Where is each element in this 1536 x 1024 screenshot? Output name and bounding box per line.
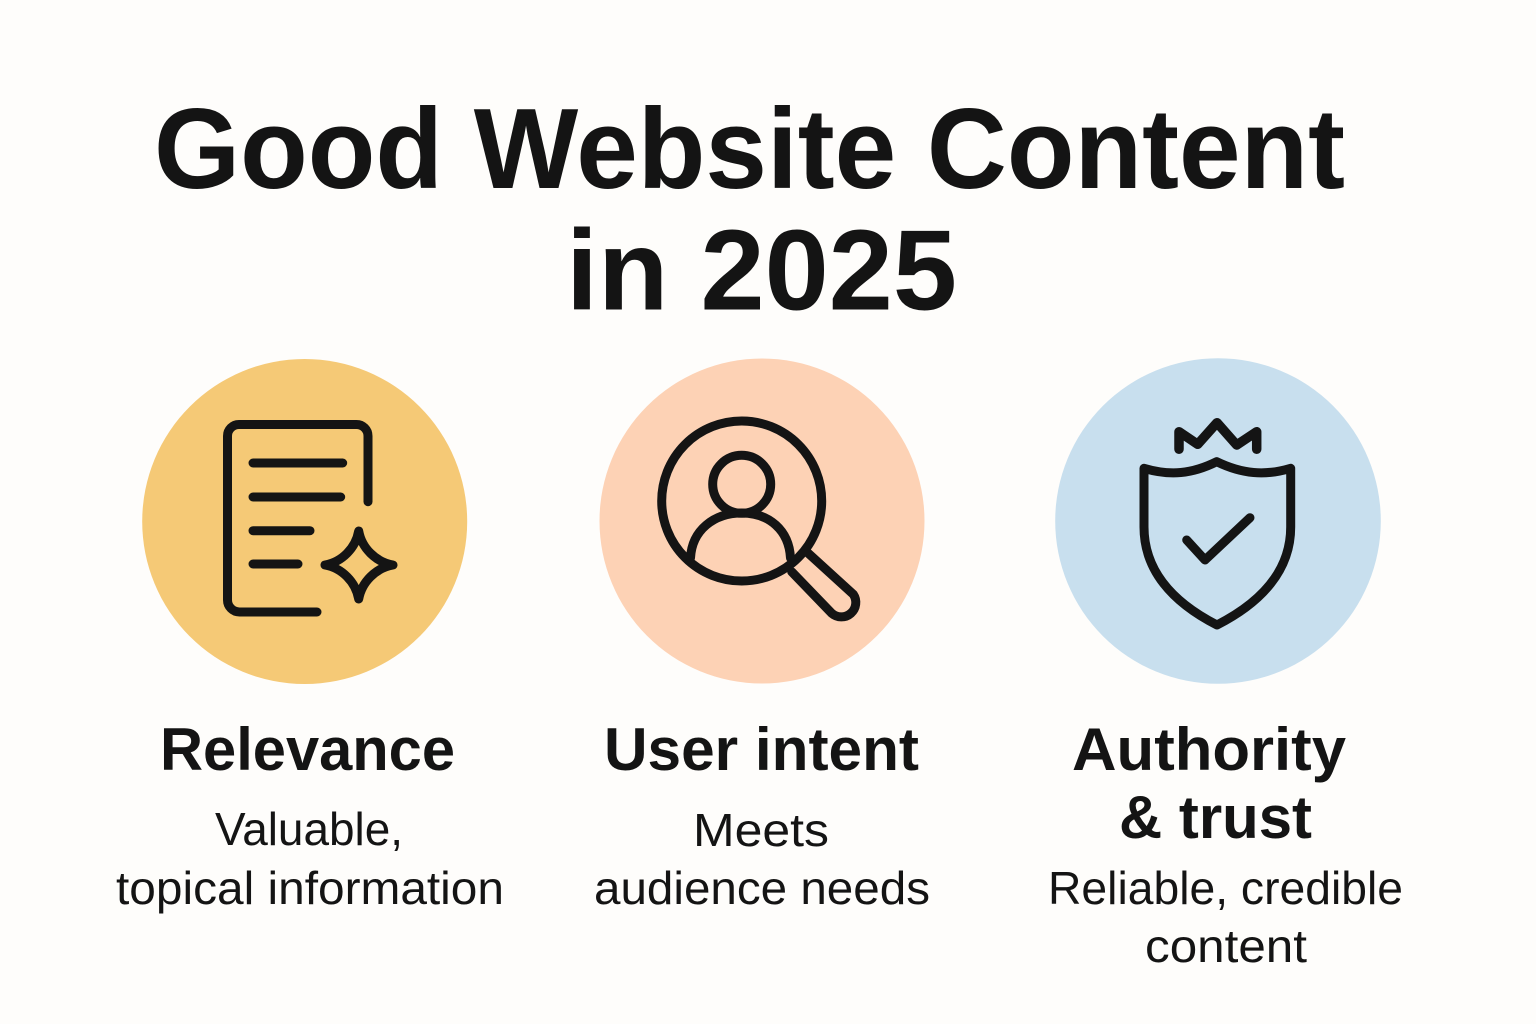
panel: relevance: [116, 359, 504, 914]
heading: relevance: Relevance: [160, 716, 455, 783]
description: relevance: Valuable,: [215, 803, 403, 855]
description: authority and trust: [1048, 862, 1403, 972]
description: user intent: Meets: [693, 804, 829, 856]
description: authority and trust: content: [1145, 920, 1307, 972]
description: relevance: [116, 803, 504, 914]
heading: authority and trust: Authority: [1072, 716, 1347, 783]
description: authority and trust: Reliable, credible: [1048, 862, 1403, 914]
title: [154, 86, 1345, 334]
icon: shield with crown and check: [1055, 358, 1381, 684]
icon: magnifier with user: [600, 358, 924, 684]
description: relevance: topical information: [116, 862, 504, 914]
title: in 2025: [566, 208, 957, 334]
panel: user intent: [594, 358, 930, 914]
description: user intent: [594, 804, 930, 914]
heading: user intent: User intent: [604, 716, 919, 783]
icon: document with sparkle: [142, 359, 467, 684]
heading: authority and trust: [1072, 716, 1347, 851]
panel: authority and trust: [1048, 358, 1403, 972]
description: user intent: audience needs: [594, 862, 930, 914]
title: Good Website Content: [154, 86, 1345, 213]
heading: authority and trust: & trust: [1119, 784, 1312, 851]
